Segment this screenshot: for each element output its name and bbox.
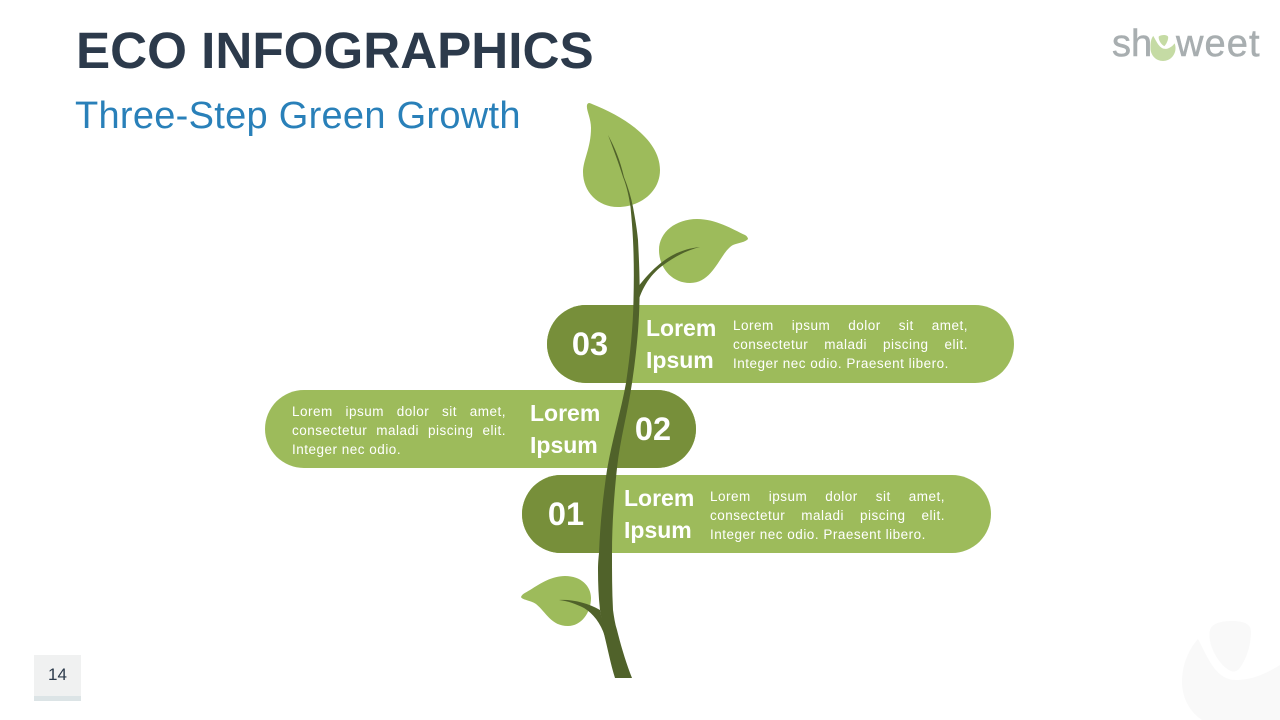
- upper branch: [636, 247, 700, 310]
- icon: right leaf: [659, 219, 748, 283]
- step 03 heading: [646, 315, 716, 373]
- step 01 heading: [624, 485, 694, 543]
- lower branch: [559, 600, 606, 640]
- logo: showeet: sh: [1112, 23, 1152, 65]
- step 02 heading: Lorem: [530, 400, 600, 426]
- logo: showeet: [1112, 23, 1261, 65]
- step 01 text: Integer nec odio. Praesent libero.: [710, 527, 926, 542]
- step 03 number: 03: [572, 326, 608, 362]
- step 03 heading: Lorem: [646, 315, 716, 341]
- step 01 text: [710, 489, 945, 542]
- step 01 heading: Ipsum: [624, 517, 692, 543]
- step 03 text: [733, 318, 968, 371]
- step 01 number: 01: [548, 496, 584, 532]
- icon: top leaf: [583, 103, 660, 207]
- panel: step 02: [265, 390, 696, 468]
- watermark: logo shape: [1160, 600, 1280, 720]
- step 02 text: [292, 404, 506, 457]
- page number strip: [34, 696, 81, 701]
- step 02 dark cap: [617, 390, 696, 468]
- step 01 text: Lorem ipsum dolor sit amet,: [710, 489, 945, 504]
- icon: logo leaf: [1150, 35, 1176, 61]
- page number text: 14: [48, 665, 67, 684]
- step 03 dark cap: [547, 305, 637, 383]
- step 03 heading: Ipsum: [646, 347, 714, 373]
- step 02 text: consectetur maladi piscing elit.: [292, 423, 506, 438]
- step 03 text: consectetur maladi piscing elit.: [733, 337, 968, 352]
- panel: step 01: [522, 475, 991, 553]
- stem: [598, 135, 640, 678]
- icon: lower leaf: [521, 576, 591, 626]
- step 02 heading: Ipsum: [530, 432, 598, 458]
- step 03 text: Integer nec odio. Praesent libero.: [733, 356, 949, 371]
- subtitle: Three-Step Green Growth: [75, 95, 521, 137]
- step 02 text: Lorem ipsum dolor sit amet,: [292, 404, 506, 419]
- step 03 text: Lorem ipsum dolor sit amet,: [733, 318, 968, 333]
- panel: step 03: [547, 305, 1014, 383]
- title: ECO INFOGRAPHICS: [76, 22, 594, 79]
- page number: [34, 655, 81, 701]
- step 01 heading: Lorem: [624, 485, 694, 511]
- step 02 heading: [530, 400, 600, 458]
- step 01 text: consectetur maladi piscing elit.: [710, 508, 945, 523]
- logo: showeet: weet: [1176, 23, 1261, 65]
- step 01 dark cap: [522, 475, 614, 553]
- step 02 number: 02: [635, 411, 671, 447]
- step 02 text: Integer nec odio.: [292, 442, 401, 457]
